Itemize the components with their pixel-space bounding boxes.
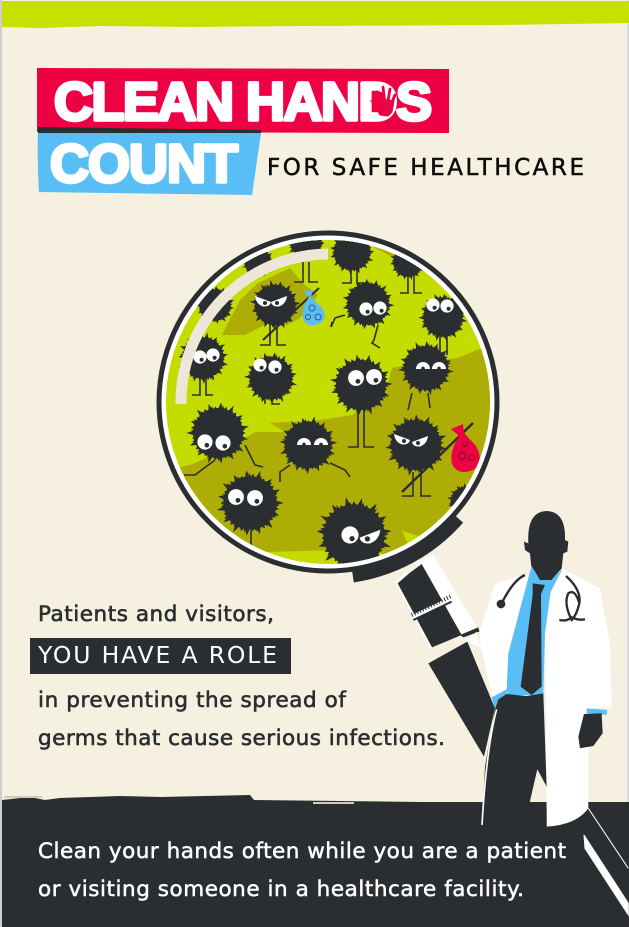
page edge right [627,0,629,927]
rim bracket [353,519,459,577]
germs [250,280,300,329]
page edge left [0,0,2,927]
olive patches [165,240,500,555]
doctor figure [480,511,628,915]
stethoscope [497,575,585,620]
subtitle: FOR SAFE HEALTHCARE [267,155,584,181]
hand [578,713,603,748]
magnifying glass lens [156,230,500,582]
dark banner seam [38,127,261,133]
text: you have a role: YOU HAVE A ROLE [37,641,277,669]
text: patients and visitors: Patients and visitors, [38,602,274,627]
trouser highlight [482,709,497,825]
red germ bundle [402,423,480,492]
top green band [2,1,629,28]
text: or visiting: or visiting someone in a healthcare facility. [38,877,524,902]
blue germ bundle [263,288,325,340]
blue shirt [492,566,607,715]
title: clean hands: CLEAN HANDS [54,72,432,132]
green wedge [402,531,419,543]
trousers [482,693,547,828]
footer edge scuff [4,796,354,804]
germ legs [184,262,447,546]
lens field with germs [166,240,490,564]
head [524,511,568,580]
title logo [37,68,584,195]
germ eyes [193,296,454,544]
body text block [30,602,445,751]
lens highlight [181,254,328,404]
footer text [38,839,566,902]
lens green background [160,235,500,570]
lens rim [159,233,497,571]
pink title banner [37,68,449,133]
text: in preventing: in preventing the spread of [38,688,346,713]
text: clean your hands: Clean your hands often while you are a patient [38,839,566,864]
role highlight box [30,638,291,674]
lower handle stripes [584,808,628,915]
icon: hand [371,87,395,116]
coat [480,568,612,827]
text: germs: germs that cause serious infections. [38,726,445,751]
footer dark band [2,795,629,927]
magnifying glass handle [395,555,495,757]
tie [521,583,545,695]
title: count: COUNT [50,134,238,194]
blue title banner [38,131,261,195]
